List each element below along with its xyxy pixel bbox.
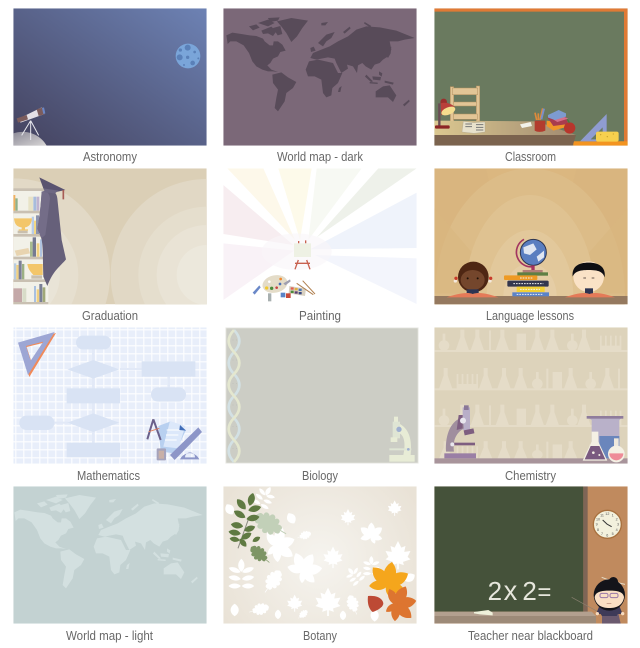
blackboard xyxy=(434,486,588,612)
icon: boy xyxy=(565,261,615,297)
equation: x xyxy=(504,575,518,606)
caption: Teacher near blackboard xyxy=(468,629,593,643)
panel: language lessons xyxy=(434,168,628,322)
icon: set square xyxy=(18,332,56,377)
caption: Botany xyxy=(303,629,338,643)
icon: wall clock: 4 xyxy=(616,528,618,532)
icon: stack of books xyxy=(547,110,568,131)
icon: conical flask xyxy=(583,432,607,461)
icon: green branch and oak leaves xyxy=(228,492,291,568)
icon: chalk xyxy=(520,122,532,128)
panel: biology xyxy=(225,327,419,483)
icon: mortarboard xyxy=(39,177,65,199)
icon: telescope on hill xyxy=(13,107,47,146)
scene: grid paper with flowchart xyxy=(13,327,207,464)
table xyxy=(434,296,628,304)
caption: Painting xyxy=(299,309,341,323)
icon: wall clock: 10 xyxy=(596,517,600,521)
icon: wall clock: 8 xyxy=(597,528,599,532)
shelves with silhouettes xyxy=(434,330,628,459)
icon: microscope xyxy=(444,405,476,458)
rays xyxy=(223,168,417,304)
panel: world map light xyxy=(13,486,207,643)
icon: wall clock: 1 xyxy=(612,513,614,517)
panel: graduation xyxy=(13,168,207,320)
pointer xyxy=(572,597,597,611)
caption: Language lessons xyxy=(486,309,574,323)
panel: teacher near blackboard xyxy=(434,486,628,643)
icon: palette xyxy=(262,275,288,293)
icon: book stack xyxy=(504,272,549,296)
icon: wall clock: 5 xyxy=(612,532,614,536)
panel: mathematics xyxy=(13,327,207,483)
background glows xyxy=(435,168,625,304)
scene: children with globe xyxy=(434,168,628,304)
scene: shelves and gown xyxy=(13,168,207,304)
caption: World map - dark xyxy=(277,150,364,164)
icon: easel xyxy=(294,240,311,269)
icon: round flask xyxy=(608,438,625,462)
white leaf silhouettes xyxy=(223,482,417,622)
books xyxy=(13,195,45,302)
chart: light world map xyxy=(14,494,203,588)
equation: = xyxy=(537,579,551,606)
caption: Biology xyxy=(302,469,339,483)
panel: botany xyxy=(223,482,420,643)
icon: wall clock: 11 xyxy=(600,513,604,517)
panel: chemistry xyxy=(434,327,628,483)
floor shelf xyxy=(434,458,628,464)
scene: grey background with DNA xyxy=(225,327,419,464)
caption: Chemistry xyxy=(505,469,557,483)
caption: World map - light xyxy=(66,629,153,643)
scene: coloured rays xyxy=(223,168,417,304)
board frame xyxy=(434,8,628,146)
icon: teacher xyxy=(594,577,625,624)
icon: DNA helix xyxy=(229,330,239,462)
scene: leaves background xyxy=(223,482,420,625)
scene: blackboard and desk xyxy=(434,8,628,146)
desk xyxy=(434,121,576,146)
icon: watercolour box xyxy=(281,286,306,298)
caption: Classroom xyxy=(505,150,556,164)
chalk tray xyxy=(434,610,596,623)
icon: girl xyxy=(447,262,498,297)
flowchart xyxy=(19,336,195,457)
scene: light map background xyxy=(13,486,207,624)
icon: set square xyxy=(580,114,607,141)
icon: wall clock: 7 xyxy=(601,532,603,536)
icon: globe on books xyxy=(516,239,546,273)
icon: wall clock: 2 xyxy=(616,517,618,521)
caption: Astronomy xyxy=(83,150,138,164)
icon: wall clock xyxy=(593,510,621,538)
icon: sponge xyxy=(596,132,619,142)
icon: wall clock: 9 xyxy=(596,523,598,527)
icon: graduation gown xyxy=(37,190,66,286)
icon: paint tubes xyxy=(253,279,291,301)
icon: wall clock: 3 xyxy=(617,523,619,527)
icon: microscope xyxy=(389,417,415,462)
icon: compass, notes, ruler, protractor xyxy=(147,419,202,460)
scene: dark map background xyxy=(223,8,417,146)
panel: classroom xyxy=(434,8,628,164)
equation: 2 xyxy=(522,576,537,606)
scene: night sky xyxy=(13,8,207,146)
caption: Mathematics xyxy=(77,469,140,483)
icon: desk lamp xyxy=(435,99,457,129)
icon: open book xyxy=(462,121,485,133)
caption: Graduation xyxy=(82,309,138,323)
bookshelf xyxy=(13,188,48,304)
equation: 2 xyxy=(488,576,502,606)
chart: dark world map xyxy=(226,17,415,111)
scene: laboratory shelves xyxy=(434,327,628,464)
icon: chair xyxy=(450,86,480,122)
scene: blackboard and wall xyxy=(434,486,628,624)
icon: apple xyxy=(564,119,575,134)
icon: pencil cup xyxy=(535,108,545,132)
icon: beaker xyxy=(587,416,623,458)
icon: moon xyxy=(176,44,200,68)
icon: brushes xyxy=(297,281,315,295)
icon: wall clock: 12 xyxy=(605,512,609,516)
icon: autumn leaves xyxy=(364,558,420,625)
background circles xyxy=(13,178,207,304)
icon: trophies xyxy=(14,218,43,279)
panel: world map dark xyxy=(223,8,417,164)
icon: wall clock: 6 xyxy=(606,533,608,537)
panel: astronomy xyxy=(13,8,207,164)
panel: painting xyxy=(223,168,417,323)
